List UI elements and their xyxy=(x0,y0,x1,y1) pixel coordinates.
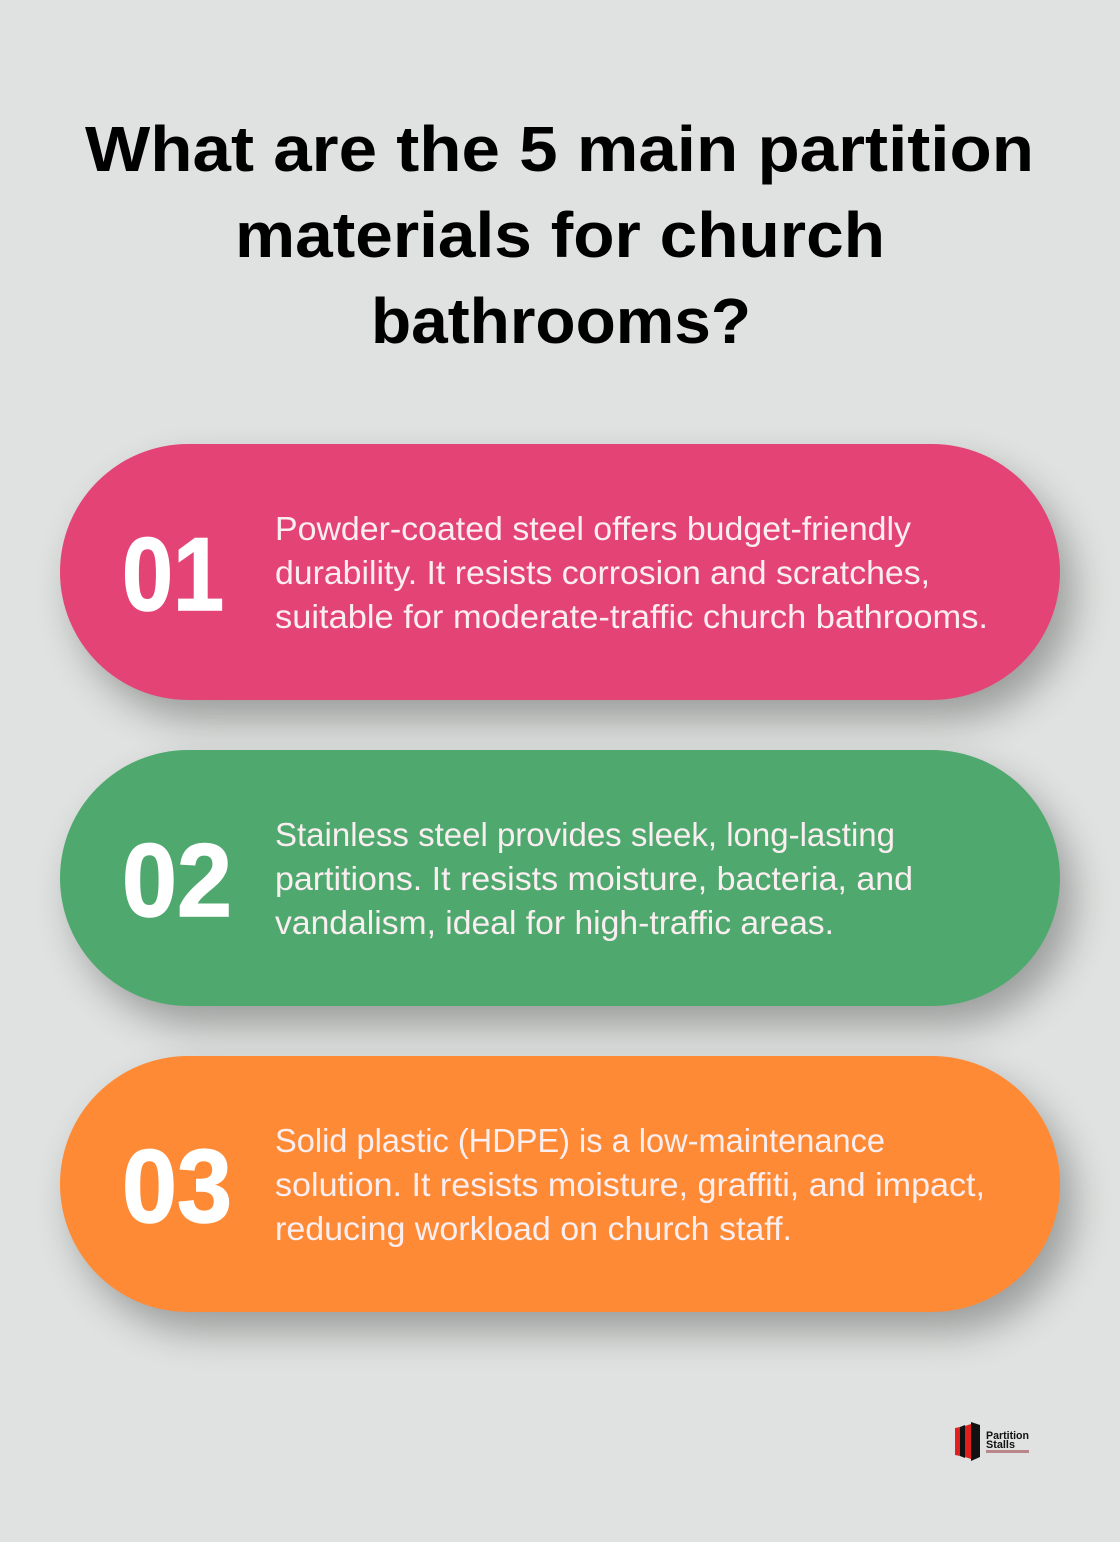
text block: solid plastic: Solid plastic (HDPE) is a low-maintenance xyxy=(275,1122,885,1159)
text block: stainless steel xyxy=(275,816,913,941)
title: bathrooms? xyxy=(371,285,751,357)
title xyxy=(85,113,1034,357)
logo: Partition Stalls xyxy=(955,1422,1029,1461)
text block: solid plastic: reducing workload on church staff. xyxy=(275,1210,792,1247)
logo: Partition Stalls: Partition xyxy=(986,1430,1029,1442)
text block: powder-coated steel xyxy=(275,510,988,635)
text block: stainless steel: Stainless steel provides sleek, long-lasting xyxy=(275,816,895,853)
text block: solid plastic xyxy=(275,1122,985,1247)
title: materials for church xyxy=(235,199,885,271)
panel: stainless steel xyxy=(60,750,1060,1006)
text block: powder-coated steel: Powder-coated steel offers budget-friendly xyxy=(275,510,912,547)
text block: powder-coated steel: durability. It resists corrosion and scratches, xyxy=(275,554,930,591)
text block: stainless steel: vandalism, ideal for high-traffic areas. xyxy=(275,904,834,941)
logo: Partition Stalls: Stalls xyxy=(986,1439,1015,1451)
title: What are the 5 main partition xyxy=(85,113,1034,185)
text block: powder-coated steel: suitable for moderate-traffic church bathrooms. xyxy=(275,598,988,635)
number 01: 01 xyxy=(122,517,224,633)
number 03: 03 xyxy=(122,1129,232,1245)
text block: stainless steel: partitions. It resists moisture, bacteria, and xyxy=(275,860,913,897)
panel: solid plastic xyxy=(60,1056,1060,1312)
panel: powder-coated steel xyxy=(60,444,1060,700)
text block: solid plastic: solution. It resists moisture, graffiti, and impact, xyxy=(275,1166,985,1203)
number 02: 02 xyxy=(122,823,232,939)
